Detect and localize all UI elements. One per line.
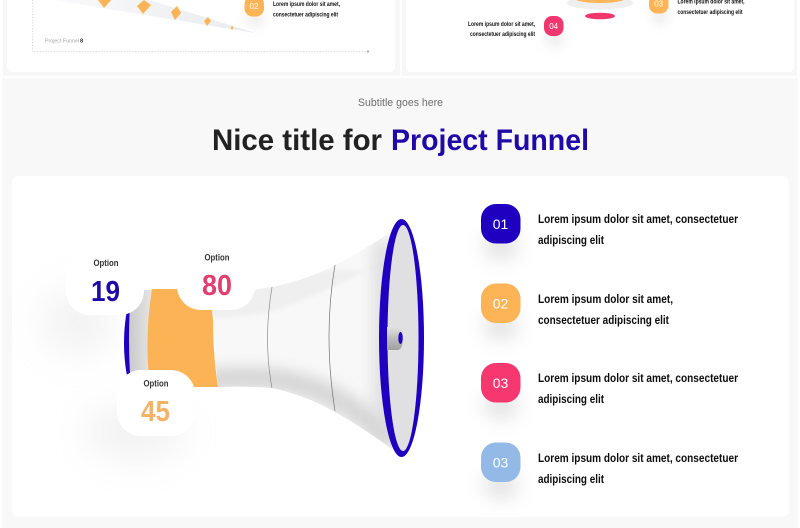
megaphone back rim <box>127 310 130 376</box>
text 02: consectetuer adipiscing elit <box>538 315 669 327</box>
megaphone mouth rim <box>379 219 424 457</box>
funnel base discs <box>567 0 633 19</box>
megaphone orange band <box>147 289 218 387</box>
badge 04 small <box>544 16 564 46</box>
option card 45: Option <box>144 378 168 388</box>
text 03: Lorem ipsum dolor sit amet, consectetuer <box>538 373 738 385</box>
text 02: Lorem ipsum dolor sit amet, <box>538 294 673 306</box>
text 01 <box>538 214 738 247</box>
badge 02 <box>481 284 520 340</box>
text 02 <box>538 294 673 327</box>
badge 02 small: 02 <box>250 2 259 11</box>
badge 04: 03 <box>493 454 508 470</box>
badge 03: 03 <box>493 375 508 391</box>
option card 45: 45 <box>141 396 170 428</box>
panel: top-left thumbnail <box>3 0 400 76</box>
badge 01: 01 <box>493 216 508 232</box>
megaphone horn <box>205 231 396 449</box>
megaphone driver <box>387 327 403 350</box>
badge 01 <box>481 204 520 260</box>
option card 80 <box>177 243 255 310</box>
axis caption number: 8 <box>80 38 84 44</box>
text 04: Lorem ipsum dolor sit amet, consectetuer <box>538 453 738 465</box>
badge 03 small <box>649 0 669 23</box>
list item 04 <box>481 442 738 499</box>
badge 04 <box>481 442 520 499</box>
option card 45 <box>117 370 195 436</box>
text 03: adipiscing elit <box>538 394 604 406</box>
text: item 04 small: Lorem ipsum dolor sit amet, <box>468 21 535 28</box>
text 04 <box>538 453 738 486</box>
megaphone back tube <box>129 290 152 387</box>
text: item 04 small <box>468 21 535 38</box>
option card 19 <box>66 248 144 315</box>
text 01: Lorem ipsum dolor sit amet, consectetuer <box>538 214 738 226</box>
title: Project Funnel <box>391 124 589 157</box>
text: item 03 small: consectetuer adipiscing elit <box>678 9 742 16</box>
text: item 02 small <box>273 1 340 18</box>
option card 80: Option <box>204 252 230 262</box>
panel: top-right thumbnail <box>402 0 797 76</box>
panel: content card <box>12 176 789 517</box>
text: item 02 small: Lorem ipsum dolor sit amet, <box>273 1 340 8</box>
subtitle: Subtitle goes here <box>358 97 443 109</box>
list item 01 <box>481 204 738 260</box>
option card 80: 80 <box>202 270 232 302</box>
badge 03 <box>481 363 520 419</box>
list item 02 <box>481 284 673 340</box>
funnel wedge with diamonds <box>53 0 255 33</box>
megaphone illustration <box>127 219 424 457</box>
option card 19: 19 <box>91 276 120 308</box>
soft shadows behind option cards <box>42 288 185 458</box>
text: item 02 small: consectetuer adipiscing elit <box>273 12 338 18</box>
badge 04 small: 04 <box>549 22 559 31</box>
text 04: adipiscing elit <box>538 474 604 486</box>
list item 03 <box>481 363 738 419</box>
text 03 <box>538 373 738 406</box>
text: item 04 small: consectetuer adipiscing elit <box>470 31 535 38</box>
text 01: adipiscing elit <box>538 235 604 247</box>
text: item 03 small <box>678 0 745 16</box>
title: Nice title for <box>212 124 382 157</box>
option card 19: Option <box>94 258 118 268</box>
badge 02: 02 <box>493 296 508 312</box>
title <box>212 124 589 157</box>
badge 02 small <box>244 0 264 26</box>
axis caption: Project Funnel <box>45 38 79 44</box>
